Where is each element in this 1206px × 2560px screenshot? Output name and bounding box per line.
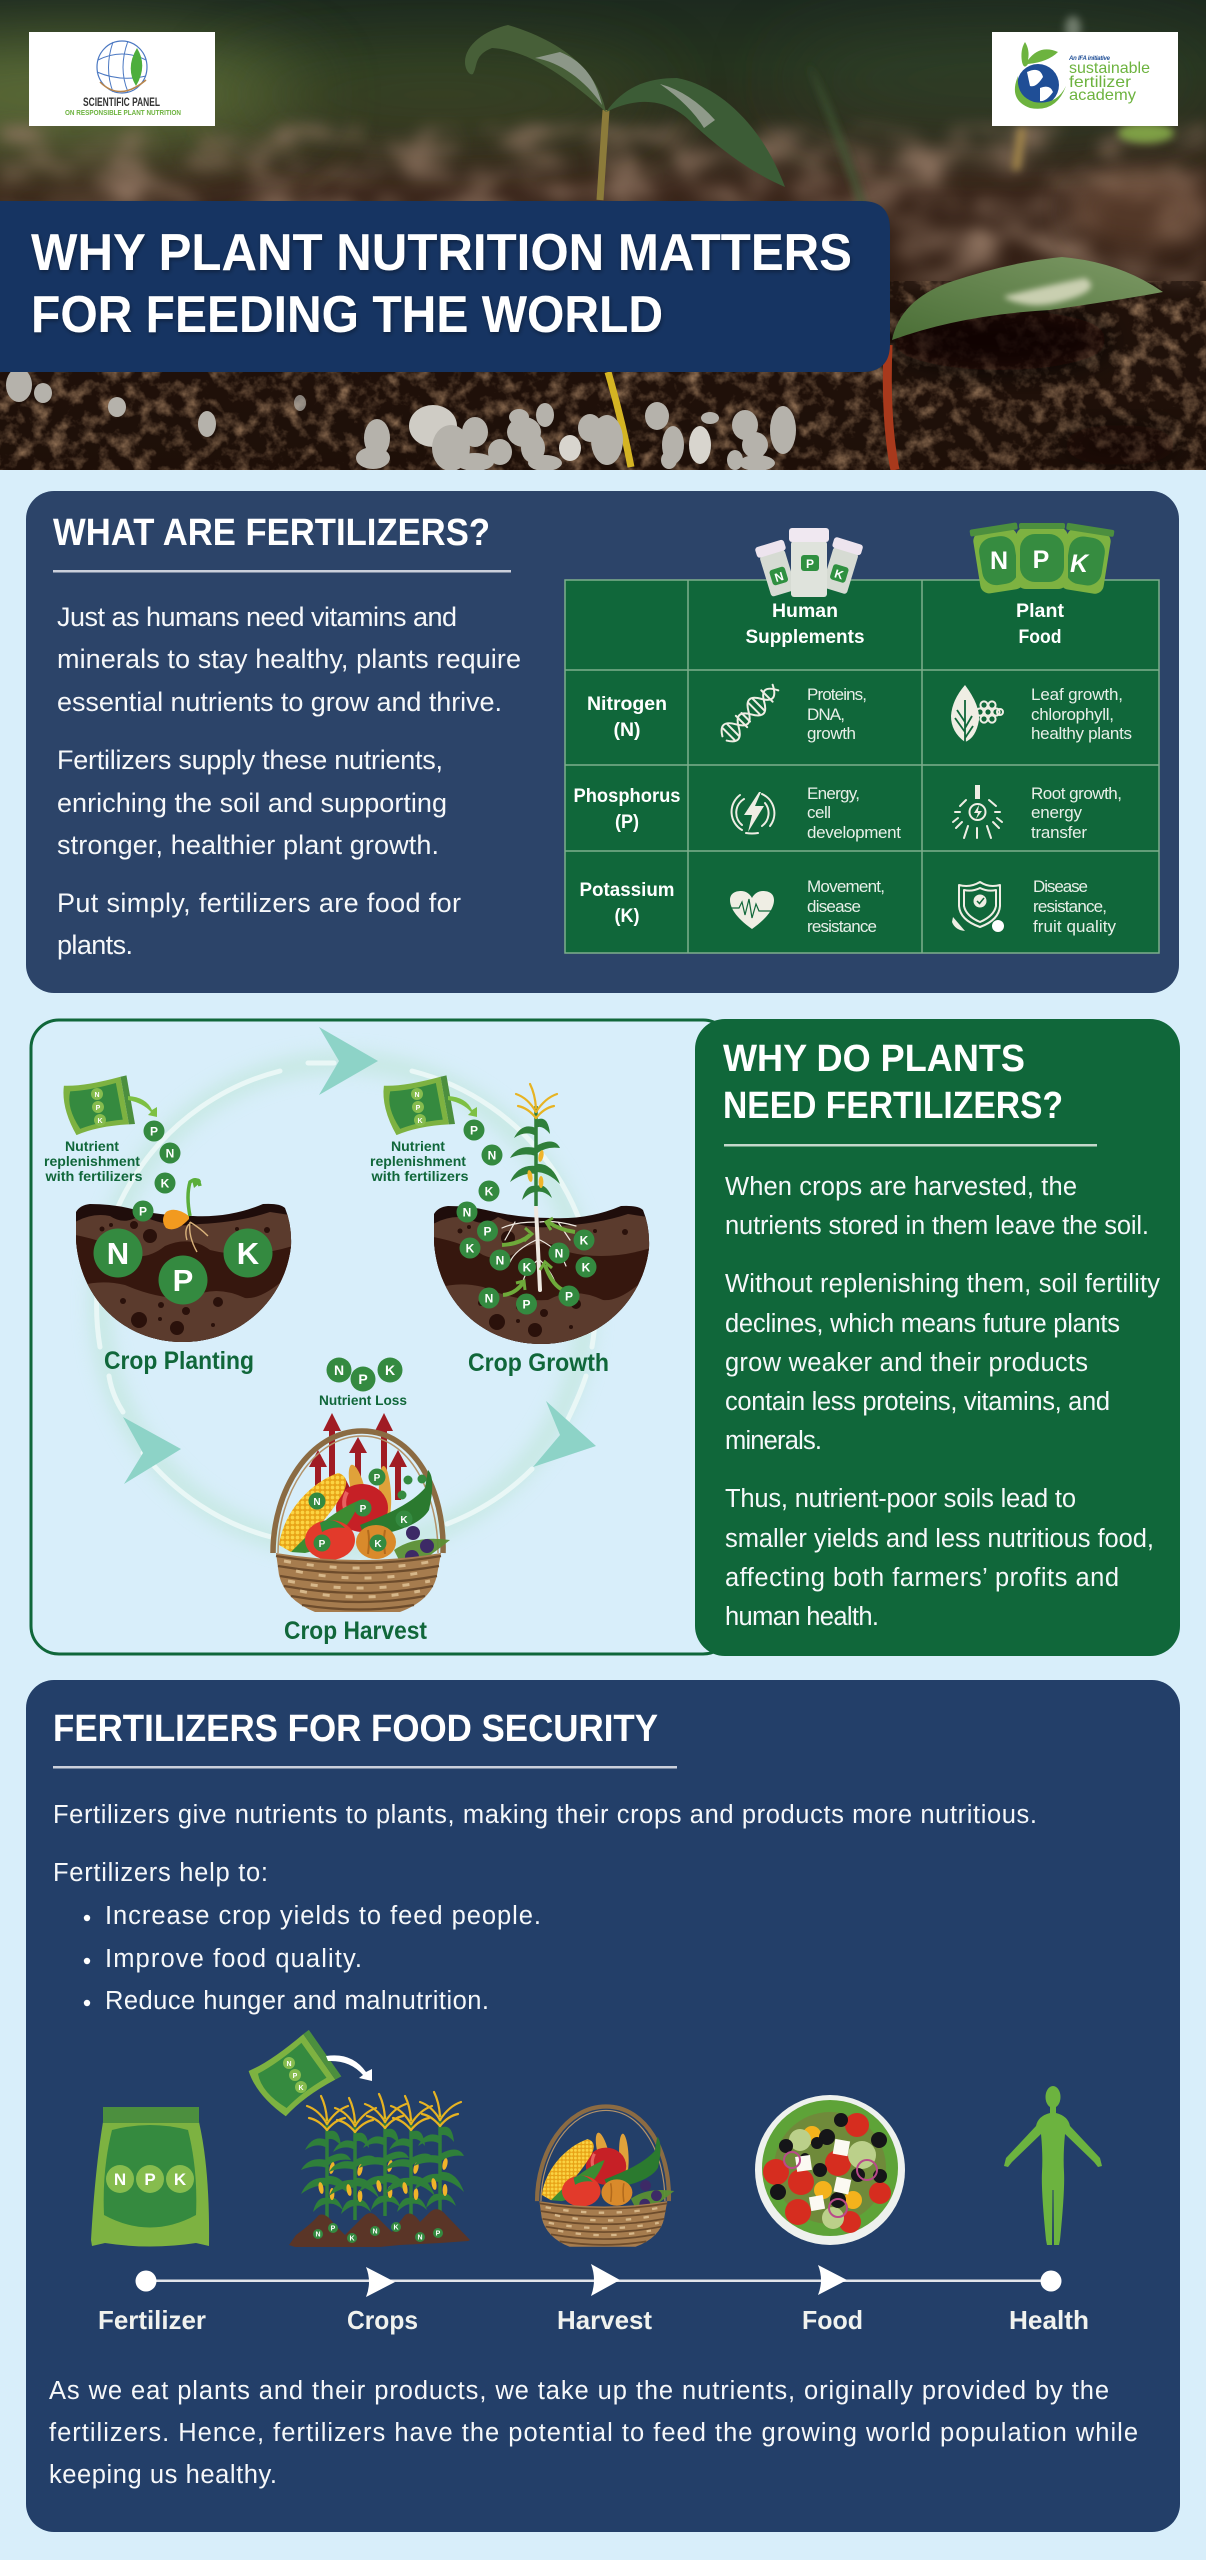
icon: npk supplement bottles: K [833, 566, 846, 582]
label: nutrient replenishment: with fertilizers [44, 1168, 143, 1184]
text block: why fertilizers: contain less proteins, vitamins, and [725, 1388, 1110, 1416]
icon: small fertilizer bag with arrow [244, 2027, 372, 2122]
text block: why fertilizers: grow weaker and their products [725, 1349, 1088, 1377]
text: proteins dna growth: growth [807, 724, 856, 743]
icon: shield with check [952, 882, 1004, 932]
nutrients in soil: N [555, 1246, 563, 1260]
fertilizer bag pouring: P [416, 1105, 421, 1112]
heading: what are fertilizers: WHAT ARE FERTILIZERS? [53, 512, 490, 554]
icon: dna helix [717, 680, 783, 746]
table: human supplements vs plant food [565, 580, 1159, 953]
text: root growth: Root growth, [1031, 784, 1122, 803]
roots [502, 1208, 576, 1290]
icon: crops row: P [436, 2230, 441, 2238]
label: crop growth: Crop Growth [468, 1349, 609, 1377]
title banner [0, 201, 890, 372]
icon: npk fertilizer bags [969, 522, 1115, 595]
text block: closing statement: keeping us healthy. [49, 2461, 277, 2489]
label: nutrient replenishment: Nutrient [391, 1138, 445, 1154]
text block: fertilizers explained: minerals to stay healthy, plants require [57, 644, 521, 674]
arrow: left [123, 1417, 181, 1484]
nutrient loss balls: N [334, 1362, 344, 1378]
icon: fertilizer bag: P [144, 2170, 156, 2189]
nutrients in soil: N [463, 1206, 471, 1220]
icon: small fertilizer bag with arrow: N [286, 2061, 292, 2068]
nutrient loss balls [326, 1358, 402, 1392]
icon: leaf with honeycomb [951, 685, 1003, 750]
logo: Scientific Panel [29, 32, 215, 126]
panel: nutrient cycle diagram [31, 1020, 731, 1654]
fertilizer granules [6, 368, 796, 471]
basket nutrients: K [400, 1515, 408, 1526]
basket nutrients: N [313, 1497, 321, 1508]
text block: why fertilizers [725, 1173, 1160, 1631]
column header: human supplements [746, 601, 864, 648]
bullet list: Improve food quality. [105, 1945, 362, 1973]
nutrient balls large: K [237, 1236, 260, 1271]
nutrients in soil: N [488, 1148, 496, 1162]
icon: lightning energy [732, 792, 774, 834]
logo: Scientific Panel: ON RESPONSIBLE PLANT NUTRITION [65, 108, 181, 117]
central seedling [600, 110, 606, 200]
cycle ring [97, 1062, 595, 1548]
nutrients in soil: K [485, 1184, 494, 1198]
icon: crops row: N [372, 2228, 378, 2236]
heading: why do plants need fertilizers: WHY DO PLANTS [723, 1038, 1025, 1080]
bullet list: Reduce hunger and malnutrition. [105, 1987, 489, 2015]
icon: fertilizer bag [91, 2107, 209, 2246]
panel: why do plants need fertilizers [695, 1019, 1180, 1656]
nutrients in soil: K [466, 1242, 475, 1256]
nutrient loss balls: P [358, 1371, 368, 1387]
text: energy cell development: development [807, 823, 901, 842]
text block: fertilizers explained [57, 602, 521, 960]
basket nutrients [308, 1468, 426, 1552]
basket nutrients: P [374, 1473, 381, 1484]
row header: nitrogen [587, 694, 667, 741]
fertilizer bag pouring [383, 1075, 477, 1136]
arrow: right [533, 1401, 596, 1467]
icon: npk fertilizer bags: P [1033, 546, 1049, 574]
timeline labels: Harvest [557, 2305, 652, 2335]
text: proteins dna growth: DNA, [807, 705, 845, 724]
falling nutrients: K [161, 1176, 170, 1190]
nutrients in soil: K [580, 1234, 589, 1248]
icon: npk supplement bottles: P [806, 557, 814, 571]
heading: why do plants need fertilizers [723, 1038, 1063, 1127]
arrow: top [319, 1027, 378, 1095]
nutrients in soil: P [470, 1124, 478, 1138]
icon: crops row [289, 2092, 470, 2247]
falling nutrients: N [166, 1146, 174, 1160]
timeline with arrows [136, 2264, 1062, 2297]
label: nutrient replenishment: replenishment [44, 1153, 140, 1169]
text: leaf growth [1031, 685, 1132, 743]
icon: npk fertilizer bags: N [990, 547, 1008, 575]
text: leaf growth: healthy plants [1031, 724, 1132, 743]
bullet list [84, 1902, 541, 2015]
basket nutrients: K [374, 1539, 382, 1550]
text block: why fertilizers: affecting both farmers’ profits and [725, 1564, 1119, 1592]
row header: nitrogen: (N) [614, 720, 640, 741]
heading: why do plants need fertilizers: NEED FERTILIZERS? [723, 1085, 1063, 1127]
text: movement disease resistance: disease [807, 897, 861, 916]
nutrients in soil: K [523, 1260, 532, 1274]
text block: closing statement [49, 2377, 1138, 2489]
icon: npk supplement bottles [755, 528, 864, 598]
bullet list: Increase crop yields to feed people. [105, 1902, 541, 1930]
text block: why fertilizers: minerals. [725, 1427, 822, 1455]
text: proteins dna growth: Proteins, [807, 685, 867, 704]
heading: fertilizers for food security: FERTILIZERS FOR FOOD SECURITY [53, 1708, 658, 1750]
icon: crops row: N [315, 2232, 321, 2238]
column header: plant food: Food [1018, 627, 1062, 648]
text block: fertilizers explained: enriching the soil and supporting [57, 788, 447, 818]
icon: human figure [1004, 2086, 1102, 2245]
icon: crops row: K [393, 2224, 399, 2232]
row header: phosphorus: Phosphorus [574, 786, 680, 807]
falling nutrients [132, 1120, 180, 1222]
label: nutrient replenishment [370, 1138, 469, 1184]
red nutrient loss arrows [309, 1413, 407, 1500]
text: disease resistance fruit quality: fruit quality [1033, 917, 1116, 936]
icon: small fertilizer bag with arrow: P [293, 2073, 298, 2080]
icon: fertilizer bag: N [114, 2170, 126, 2189]
row header: potassium [580, 880, 674, 927]
icon: small fertilizer bag with arrow: K [298, 2085, 304, 2092]
text: energy cell development: Energy, [807, 784, 860, 803]
logo: Sustainable Fertilizer Academy [992, 32, 1178, 126]
column header: plant food [1016, 601, 1065, 648]
text block: intro [53, 1801, 1037, 1887]
text block: fertilizers explained: Put simply, fertilizers are food for [57, 888, 461, 918]
row header: phosphorus [574, 786, 680, 833]
icon: npk fertilizer bags: K [1070, 550, 1090, 578]
panel: fertilizers for food security [26, 1680, 1180, 2532]
nutrients in soil: P [483, 1224, 492, 1238]
text: proteins dna growth [807, 685, 867, 743]
text block: why fertilizers: nutrients stored in them leave the soil. [725, 1212, 1149, 1240]
text: root growth: transfer [1031, 823, 1087, 842]
text: movement disease resistance [807, 877, 885, 936]
text block: why fertilizers: smaller yields and less nutritious food, [725, 1525, 1154, 1553]
timeline labels: Food [802, 2305, 863, 2335]
row header: potassium: Potassium [580, 880, 674, 901]
nutrients in soil: K [582, 1260, 591, 1274]
label: nutrient replenishment [44, 1138, 143, 1184]
corn plant [510, 1084, 560, 1206]
timeline labels: Health [1009, 2305, 1089, 2335]
fertilizer bag pouring [63, 1075, 157, 1136]
fertilizer bag pouring: P [96, 1105, 101, 1112]
icon: crops row: K [349, 2236, 355, 2242]
text: disease resistance fruit quality: resistance, [1033, 897, 1107, 916]
timeline labels: Crops [347, 2305, 418, 2335]
text block: why fertilizers: human health. [725, 1603, 879, 1631]
column header: plant food: Plant [1016, 601, 1065, 622]
fruit and vegetable basket [273, 1431, 450, 1612]
nutrient balls large: P [173, 1263, 193, 1298]
label: nutrient replenishment: replenishment [370, 1153, 466, 1169]
icon: npk supplement bottles: N [773, 569, 785, 585]
crop harvest illustration [273, 1358, 450, 1645]
text block: why fertilizers: Without replenishing them, soil fertility [725, 1270, 1160, 1298]
basket nutrients: P [360, 1504, 367, 1515]
text: disease resistance fruit quality: Disease [1033, 877, 1088, 896]
label: nutrient loss: Nutrient Loss [319, 1392, 407, 1408]
nutrients in soil [456, 1120, 596, 1314]
crop growth illustration [370, 1075, 654, 1377]
text block: intro: Fertilizers help to: [53, 1859, 268, 1887]
text block: closing statement: As we eat plants and their products, we take up the nutrients, originally provided by the [49, 2377, 1109, 2405]
title banner: FOR FEEDING THE WORLD [31, 286, 663, 344]
fertilizer bag pouring: N [414, 1092, 420, 1099]
column header: human supplements: Supplements [746, 627, 864, 648]
label: nutrient replenishment: with fertilizers [370, 1168, 469, 1184]
hero photo: seedlings in soil with fertilizer granules [0, 0, 1206, 471]
icon: fertilizer bag: K [174, 2170, 187, 2189]
label: crop harvest: Crop Harvest [284, 1617, 428, 1645]
text: movement disease resistance: resistance [807, 917, 877, 936]
text: root growth [1031, 784, 1122, 842]
panel: what are fertilizers [26, 491, 1180, 2532]
icon: roots with energy [953, 785, 1002, 838]
logo: Sustainable Fertilizer Academy: An IFA initiative [1068, 56, 1111, 62]
root uptake arrows [502, 1218, 575, 1295]
row header: potassium: (K) [614, 906, 640, 927]
logo: Sustainable Fertilizer Academy: fertilizer [1069, 74, 1132, 91]
text block: closing statement: fertilizers. Hence, fertilizers have the potential to feed the growing world population while [49, 2419, 1138, 2447]
text block: fertilizers explained: essential nutrients to grow and thrive. [57, 687, 502, 717]
falling nutrients: P [150, 1124, 158, 1138]
logo: Sustainable Fertilizer Academy: academy [1069, 87, 1136, 104]
sprout seed [163, 1178, 208, 1252]
background blurred plants [816, 12, 1178, 201]
timeline labels [98, 2305, 1089, 2335]
label: crop planting: Crop Planting [104, 1347, 254, 1375]
crop planting illustration [44, 1075, 296, 1375]
text block: why fertilizers: When crops are harvested, the [725, 1173, 1077, 1201]
icon: harvest basket [537, 2107, 674, 2247]
text: disease resistance fruit quality [1033, 877, 1116, 936]
column header: human supplements: Human [772, 601, 838, 622]
text: leaf growth: chlorophyll, [1031, 705, 1114, 724]
text block: fertilizers explained: Just as humans need vitamins and [57, 602, 457, 632]
basket nutrients: P [319, 1539, 326, 1550]
fertilizer bag pouring: N [94, 1092, 100, 1099]
nutrients in soil: N [485, 1292, 493, 1306]
icon: salad plate [755, 2095, 905, 2245]
fertilizer bag pouring: K [417, 1118, 423, 1125]
text block: fertilizers explained: plants. [57, 930, 133, 960]
text block: fertilizers explained: stronger, healthier plant growth. [57, 830, 439, 860]
icon: crops row: N [417, 2234, 423, 2242]
text: movement disease resistance: Movement, [807, 877, 885, 896]
nutrients in soil: P [522, 1298, 531, 1312]
title banner: WHY PLANT NUTRITION MATTERS [31, 224, 852, 282]
right seedling [887, 345, 895, 470]
falling nutrients: P [139, 1204, 147, 1218]
text: energy cell development [807, 784, 901, 842]
nutrients in soil: P [565, 1290, 573, 1304]
text block: why fertilizers: declines, which means future plants [725, 1310, 1120, 1338]
text block: fertilizers explained: Fertilizers supply these nutrients, [57, 745, 443, 775]
row header: phosphorus: (P) [615, 812, 639, 833]
label: nutrient replenishment: Nutrient [65, 1138, 119, 1154]
timeline labels: Fertilizer [98, 2305, 206, 2335]
fertilizer bag pouring: K [97, 1118, 103, 1125]
icon: crops row: P [331, 2226, 336, 2232]
logo: Scientific Panel: SCIENTIFIC PANEL [83, 95, 160, 109]
nutrients in soil: N [496, 1254, 504, 1268]
text: energy cell development: cell [807, 803, 831, 822]
text block: why fertilizers: Thus, nutrient-poor soils lead to [725, 1485, 1076, 1513]
nutrient balls large [94, 1228, 272, 1304]
nutrient balls large: N [107, 1236, 129, 1271]
row header: nitrogen: Nitrogen [587, 694, 667, 715]
text: leaf growth: Leaf growth, [1031, 685, 1123, 704]
icon: heart with pulse [730, 891, 774, 929]
text: root growth: energy [1031, 803, 1082, 822]
text block: intro: Fertilizers give nutrients to plants, making their crops and products more nutritious. [53, 1801, 1037, 1829]
logo: Sustainable Fertilizer Academy: sustainable [1069, 60, 1150, 77]
nutrient loss balls: K [385, 1362, 395, 1378]
